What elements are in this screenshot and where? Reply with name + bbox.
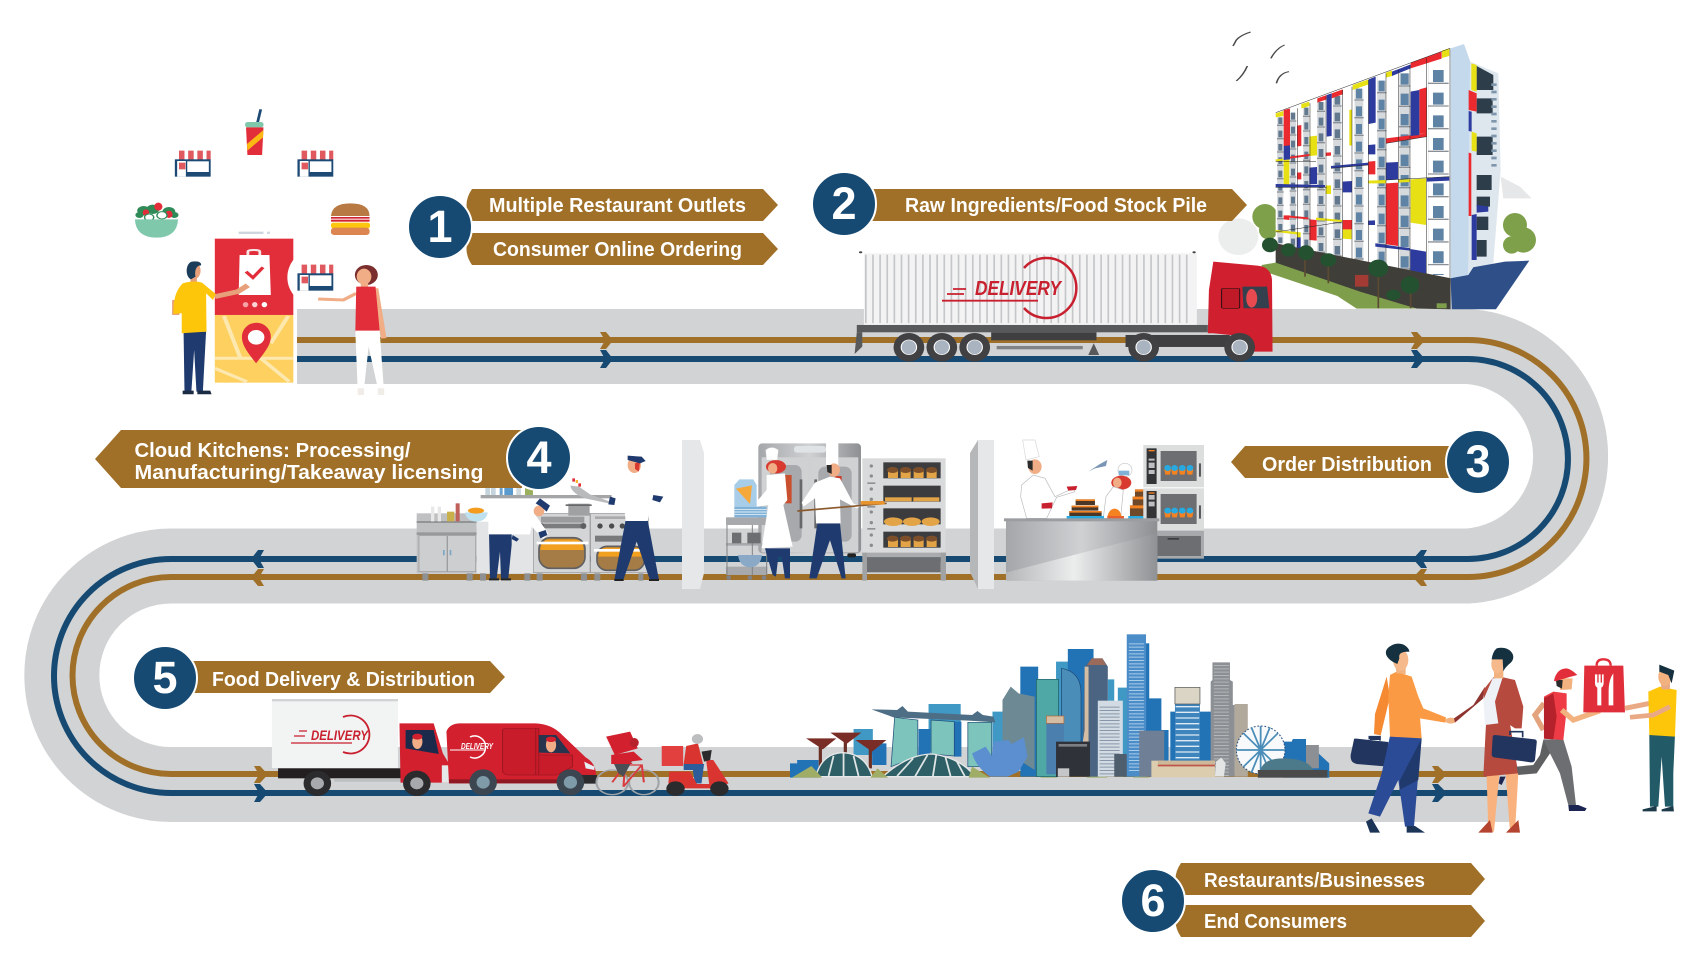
food bag: [1583, 659, 1625, 712]
scene: bakery and pastry: [726, 440, 1204, 581]
cakes: [1067, 489, 1151, 519]
arrows on road: [251, 332, 1447, 802]
background towers: [790, 649, 1329, 778]
woman with briefcase: [1454, 648, 1537, 833]
badge 1: 1: [427, 201, 453, 252]
scooter courier: [662, 734, 729, 796]
scene: cloud kitchen stoves and chefs: [417, 456, 669, 581]
bakery oven: [758, 443, 861, 557]
badge 5: [133, 646, 197, 710]
pastry chef woman: [1103, 463, 1132, 518]
badge 3: 3: [1465, 436, 1491, 487]
badge 2: 2: [831, 178, 857, 229]
clouds: [1218, 177, 1532, 255]
label 1: restaurant outlets and online ordering: [408, 189, 778, 265]
counter and stoves: [417, 503, 648, 581]
label 5: food delivery: [133, 646, 505, 710]
wall divider left: [682, 440, 704, 589]
central towers: [1002, 634, 1164, 777]
gold flow line: [72, 340, 1586, 774]
steel table: [1004, 518, 1159, 581]
eastern towers: [1175, 662, 1319, 777]
building facade: [1276, 48, 1488, 309]
logo: truck delivery: DELIVERY: [311, 727, 369, 743]
singapore skyline: [790, 634, 1329, 778]
label 2: raw ingredients: [812, 172, 1247, 236]
logo: van delivery: DELIVERY: [461, 742, 494, 751]
badge 5: 5: [152, 652, 178, 703]
label 4: cloud kitchens: [95, 426, 571, 490]
scene: consumer online ordering: [135, 109, 384, 395]
building side: [1451, 44, 1529, 309]
banner: raw ingredients: Raw Ingredients/Food Stock Pile: [905, 195, 1207, 217]
banner: restaurants and businesses: [1176, 863, 1485, 895]
banner: consumer online ordering: [466, 233, 778, 265]
red van: [446, 723, 597, 795]
chef man with peel: [797, 443, 887, 578]
art science museum: [972, 737, 1027, 777]
banner: restaurants and businesses: Restaurants/Businesses: [1204, 870, 1425, 892]
banner: multiple restaurant outlets: [466, 189, 778, 221]
banner: cloud kitchens: Manufacturing/Takeaway licensing: [134, 462, 484, 484]
logo: van delivery: [450, 736, 494, 758]
logo: container delivery: DELIVERY: [975, 278, 1062, 300]
blue flow line: [54, 359, 1568, 793]
chef woman: [757, 447, 793, 578]
phone with map: [215, 232, 344, 383]
bicycle courier: [596, 732, 659, 795]
label 3: order distribution: [1231, 430, 1510, 494]
container truck: [855, 251, 1273, 362]
scene: warehouse building: [1218, 44, 1536, 309]
banner: raw ingredients: [870, 189, 1247, 221]
man with briefcase: [1351, 644, 1456, 833]
ground floor: [1276, 243, 1451, 309]
fullerton and merlion: [1151, 758, 1226, 777]
icon: salad bowl: [135, 203, 179, 238]
banner: end consumers: [1176, 905, 1485, 937]
banner: cloud kitchens: [95, 430, 522, 488]
badge 1: [408, 195, 472, 259]
icon: store lower: [297, 265, 333, 291]
icon: burger: [331, 203, 370, 235]
birds: [1233, 32, 1289, 83]
bread rack: [862, 458, 946, 581]
scene: delivery vehicles: [272, 699, 729, 796]
badge 6: 6: [1140, 875, 1166, 926]
badge 4: 4: [526, 432, 552, 483]
marina bay sands: [871, 706, 995, 767]
chef bending: [488, 498, 550, 580]
trees behind building: [1252, 204, 1536, 254]
pastry ovens: [1143, 445, 1204, 559]
banner: end consumers: End Consumers: [1204, 911, 1347, 933]
banner: multiple restaurant outlets: Multiple Restaurant Outlets: [489, 195, 746, 217]
trolley and plates: [726, 479, 767, 580]
shelf and utensils: [481, 471, 612, 498]
delivery truck: [272, 699, 450, 796]
man in yellow shirt: [173, 261, 248, 394]
badge 4: [507, 426, 571, 490]
ferris wheel and dome: [1236, 726, 1327, 778]
badge 2: [812, 172, 876, 236]
banner: consumer online ordering: Consumer Online Ordering: [493, 239, 742, 261]
serpentine road: [62, 346, 1571, 784]
logo: truck delivery: [291, 716, 369, 754]
icon: store left: [175, 151, 211, 177]
label 6: customers: [1121, 863, 1485, 937]
banner: order distribution: Order Distribution: [1262, 454, 1432, 476]
banner: cloud kitchens: Cloud Kitchens: Processing/: [134, 440, 411, 462]
chef with pan: [570, 456, 669, 581]
facade coloured panels: [1276, 48, 1488, 274]
wall divider right: [970, 440, 994, 589]
icon: drink cup: [245, 109, 263, 155]
trees and landscaping: [1262, 238, 1447, 309]
delivery man running: [1499, 668, 1600, 811]
gardens by the bay: [792, 733, 1151, 778]
woman in red top: [318, 265, 384, 395]
badge 3: [1446, 430, 1510, 494]
pastry chef man: [1021, 440, 1107, 518]
scene: customers: [1351, 644, 1677, 833]
banner: food delivery: Food Delivery & Distribution: [212, 669, 475, 691]
logo: container delivery: [942, 258, 1076, 318]
banner: order distribution: [1231, 446, 1452, 478]
banner: food delivery: [190, 661, 505, 693]
badge 6: [1121, 869, 1185, 933]
customer receiving bag: [1625, 665, 1677, 811]
icon: store right: [297, 151, 333, 177]
